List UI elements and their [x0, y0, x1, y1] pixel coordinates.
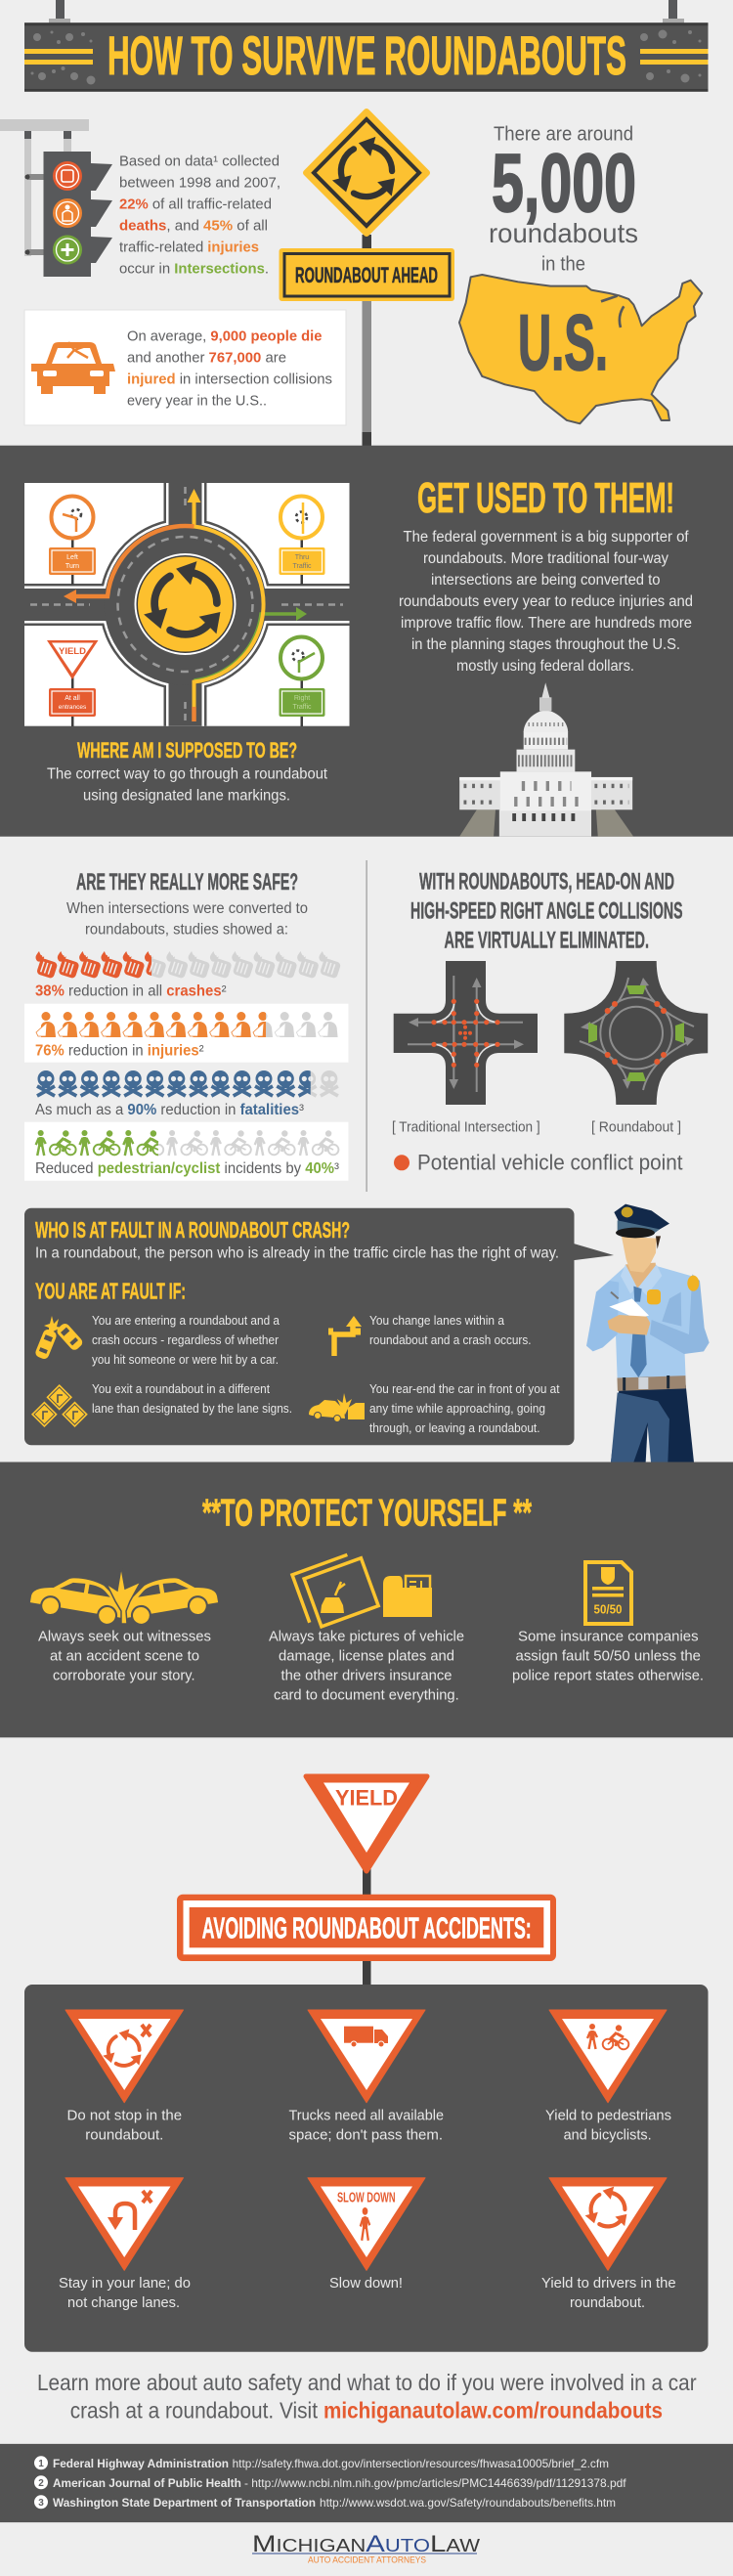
- text: fault 50/50: Some insurance companies: [518, 1628, 699, 1644]
- icon: US Capitol: [459, 682, 633, 837]
- panel: to protect yourself: [0, 1463, 733, 1737]
- text: pictures: [269, 1628, 464, 1703]
- icon: lane signs: [31, 1384, 88, 1427]
- row background: pedestrians: [24, 1122, 348, 1181]
- stat: 5,000 roundabouts: 5,000: [492, 137, 636, 229]
- source 1: http://safety.fhwa.dot.gov/intersection/resources/fhwasa10005/brief_2.cfm: [233, 2457, 609, 2470]
- icon: photographs and insurance folder: [292, 1550, 432, 1630]
- text: witnesses: [38, 1628, 211, 1683]
- source 1: Federal Highway Administration: [53, 2457, 229, 2470]
- text: pictures: card to document everything.: [274, 1686, 459, 1703]
- text: yearly deaths and injuries: and another 767,000 are: [127, 350, 286, 366]
- text: federal support: roundabouts. More traditional four-way: [423, 550, 668, 567]
- header sign: [24, 0, 708, 92]
- sign: thru traffic: Thru: [295, 554, 309, 561]
- stat: fatalities: As much as a 90% reduction in fatalities³: [35, 1102, 304, 1118]
- stat: pedestrians and cyclists: Reduced pedestrian/cyclist incidents by 40%³: [35, 1160, 339, 1177]
- sign: avoiding roundabout accidents: [177, 1895, 556, 1961]
- map: United States: [459, 275, 702, 423]
- icon: 50/50 document: [585, 1562, 631, 1624]
- sign: yield: [306, 1776, 427, 1871]
- icon row: injuries: [36, 1012, 338, 1037]
- diagram: roundabout conflict points: [564, 961, 708, 1105]
- text: yearly deaths and injuries: every year in the U.S..: [127, 393, 267, 409]
- panel: get used to them: [0, 446, 733, 837]
- text: federal support: improve traffic flow. There are hundreds more: [401, 615, 692, 632]
- icon row: pedestrians and cyclists: [36, 1130, 338, 1156]
- heading: who is at fault: WHO IS AT FAULT IN A ROUNDABOUT CRASH?: [35, 1217, 350, 1243]
- source 3: http://www.wsdot.wa.gov/Safety/roundabouts/benefits.htm: [320, 2496, 616, 2510]
- sign: yield at all entrances: YIELD: [59, 646, 86, 657]
- sign: right traffic: [280, 637, 324, 726]
- text: fault 50/50: assign fault 50/50 unless the: [516, 1647, 701, 1664]
- text: change lanes: roundabout and a crash occurs.: [369, 1333, 532, 1347]
- tip: stay in lane: not change lanes.: [67, 2294, 180, 2311]
- tip: slow down: [308, 2178, 425, 2292]
- text: fault 50/50: [512, 1628, 704, 1683]
- caption: roundabout: [ Roundabout ]: [591, 1118, 681, 1135]
- sign: yield at all entrances: entrances: [59, 704, 87, 711]
- icon: crashed car: [31, 342, 115, 394]
- text: yearly deaths and injuries: On average, 9,000 people die: [127, 328, 323, 344]
- icon: lane change arrow: [328, 1316, 362, 1356]
- panel: tips: [24, 1985, 708, 2352]
- text: witnesses: Always seek out witnesses: [38, 1628, 211, 1644]
- map: United States: U.S.: [518, 299, 608, 387]
- tip: do not stop: roundabout.: [85, 2126, 163, 2143]
- text: federal support: roundabouts every year to reduce injuries and: [399, 593, 693, 610]
- text: lane marking note: using designated lane markings.: [83, 787, 290, 804]
- text: pictures: Always take pictures of vehicle: [269, 1628, 464, 1644]
- tip: yield to drivers: roundabout.: [570, 2294, 645, 2311]
- diagram: roundabout lanes: [24, 483, 350, 726]
- figure: police officer: [586, 1204, 710, 1463]
- text: lane marking note: [47, 766, 328, 804]
- text: witnesses: at an accident scene to: [50, 1647, 199, 1664]
- text block: intersection statistics: between 1998 and 2007,: [119, 175, 280, 191]
- sign: yield: YIELD: [335, 1786, 398, 1811]
- tip: pedestrians: Yield to pedestrians: [545, 2107, 671, 2123]
- call to action: [37, 2370, 697, 2423]
- heading: where am I supposed to be: WHERE AM I SUPPOSED TO BE?: [77, 738, 297, 763]
- heading: **TO PROTECT YOURSELF **: [202, 1493, 533, 1535]
- tip: pedestrians: [545, 2010, 671, 2143]
- source 1: [34, 2456, 609, 2470]
- panel: fault speech bubble: [24, 1208, 614, 1445]
- row background: injuries: [24, 1004, 348, 1063]
- text: federal support: intersections are being converted to: [431, 572, 661, 589]
- text: right of way: In a roundabout, the person who is already in the traffic circle has the right of way.: [35, 1245, 559, 1262]
- text: entering a roundabout: you hit someone or were hit by a car.: [92, 1353, 279, 1367]
- text: yearly deaths and injuries: [127, 328, 332, 409]
- heading: [410, 868, 682, 953]
- tip: yield to drivers: Yield to drivers in the: [541, 2275, 676, 2292]
- heading: ARE THEY REALLY MORE SAFE?: [76, 869, 298, 895]
- sign: yield at all entrances: [47, 640, 98, 726]
- tip: do not stop: Do not stop in the: [67, 2107, 182, 2123]
- sign: right traffic: Right: [294, 695, 310, 702]
- heading: you are at fault if: YOU ARE AT FAULT IF:: [35, 1279, 186, 1304]
- sign: left turn: Left: [66, 554, 78, 561]
- divider: [366, 860, 367, 1192]
- text: rear-end: [369, 1382, 560, 1435]
- legend: Potential vehicle conflict point: [417, 1151, 682, 1175]
- text: wrong lane exit: You exit a roundabout in a different: [92, 1382, 270, 1396]
- tip: trucks: Trucks need all available: [289, 2107, 444, 2123]
- tip: do not stop: [65, 2010, 184, 2143]
- text: wrong lane exit: [92, 1382, 292, 1416]
- text: pictures: the other drivers insurance: [281, 1667, 452, 1683]
- panel: are they really more safe: [24, 869, 348, 1181]
- panel: intersection deaths card: [24, 310, 346, 425]
- tip: trucks: space; don't pass them.: [289, 2126, 443, 2143]
- call to action: crash at a roundabout. Visit: [70, 2397, 319, 2423]
- sign: yield at all entrances: At all: [65, 695, 80, 702]
- text: federal support: [399, 529, 693, 675]
- text: federal support: mostly using federal dollars.: [456, 658, 634, 675]
- icon: car crash: [28, 1567, 220, 1628]
- central island: [135, 553, 237, 655]
- stat: crashes: 38% reduction in all crashes²: [35, 983, 227, 1000]
- logo: MICHIGAN AUTO LAW: [252, 2531, 480, 2557]
- source 1: 1: [38, 2459, 44, 2469]
- tip: slow down: Slow down!: [329, 2275, 403, 2292]
- source 3: [34, 2495, 616, 2510]
- tip: pedestrians: and bicyclists.: [564, 2126, 652, 2143]
- call to action: michiganautolaw.com/roundabouts: [323, 2397, 663, 2423]
- text: federal support: The federal government is a big supporter of: [403, 529, 689, 546]
- text: entering a roundabout: crash occurs - regardless of whether: [92, 1333, 279, 1347]
- text: witnesses: corroborate your story.: [53, 1667, 195, 1683]
- tip: stay in lane: [59, 2178, 191, 2311]
- lane arrow: right turn: [194, 607, 307, 680]
- logo: AUTO ACCIDENT ATTORNEYS: [308, 2555, 426, 2566]
- text: entering a roundabout: [92, 1314, 280, 1367]
- tip: stay in lane: Stay in your lane; do: [59, 2275, 191, 2292]
- source 3: Washington State Department of Transportation: [53, 2496, 316, 2510]
- text: fault 50/50: police report states otherwise.: [512, 1667, 704, 1683]
- text: yearly deaths and injuries: injured in intersection collisions: [127, 371, 332, 387]
- text: pictures: damage, license plates and: [279, 1647, 454, 1664]
- stat: 5,000 roundabouts: [489, 123, 638, 276]
- sign: thru traffic: [280, 497, 324, 585]
- lane arrow: left turn: [64, 526, 194, 721]
- text: rear-end: You rear-end the car in front of you at: [369, 1382, 560, 1396]
- lane arrow: through traffic: [188, 489, 264, 709]
- tip: slow down: SLOW DOWN: [337, 2190, 396, 2205]
- text: entering a roundabout: You are entering a roundabout and a: [92, 1314, 280, 1328]
- text: federal support: in the planning stages throughout the U.S.: [411, 636, 680, 653]
- diagram: traditional intersection: [394, 961, 538, 1105]
- intro text: roundabouts, studies showed a:: [85, 922, 288, 939]
- text block: intersection statistics: deaths, and 45% of all: [119, 218, 268, 234]
- sign: left turn: [49, 497, 96, 585]
- stat: 5,000 roundabouts: in the: [541, 254, 585, 276]
- source 3: 3: [38, 2498, 44, 2509]
- text: rear-end: through, or leaving a roundabout.: [369, 1421, 539, 1435]
- sign: left turn: Turn: [65, 563, 79, 570]
- icon: rear-end collision: [309, 1393, 365, 1421]
- intro text: [66, 900, 308, 939]
- source 2: [34, 2475, 626, 2490]
- sign post: [363, 1857, 371, 1989]
- tip: trucks: [289, 2010, 444, 2143]
- text block: intersection statistics: Based on data¹ collected: [119, 153, 280, 169]
- source 2: 2: [38, 2478, 44, 2489]
- text: change lanes: You change lanes within a: [369, 1314, 504, 1328]
- text block: intersection statistics: occur in Intersections.: [119, 261, 269, 277]
- tip: yield to drivers: [541, 2178, 676, 2311]
- text block: intersection statistics: 22% of all traffic-related: [119, 196, 272, 212]
- sign: thru traffic: Traffic: [292, 563, 312, 570]
- panel: conflict points: [392, 868, 708, 1175]
- stat: 5,000 roundabouts: roundabouts: [489, 218, 638, 248]
- text: change lanes: [369, 1314, 532, 1347]
- icon row: fatalities: [37, 1070, 338, 1096]
- panel: sources: [0, 2443, 733, 2523]
- icon: colliding cars: [34, 1316, 84, 1361]
- stat: 5,000 roundabouts: There are around: [494, 123, 633, 145]
- source 2: American Journal of Public Health: [53, 2476, 241, 2490]
- text: wrong lane exit: lane than designated by the lane signs.: [92, 1402, 292, 1416]
- source 2: - http://www.ncbi.nlm.nih.gov/pmc/articles/PMC1446639/pdf/11291378.pdf: [244, 2476, 626, 2490]
- text block: intersection statistics: [119, 153, 280, 277]
- text: rear-end: any time while approaching, going: [369, 1402, 545, 1416]
- icon row: crashes: [36, 951, 341, 979]
- sign: roundabout ahead: [280, 111, 454, 446]
- sign: right traffic: Traffic: [292, 704, 312, 711]
- text block: intersection statistics: traffic-related injuries: [119, 240, 259, 255]
- icon: 50/50 document: 50/50: [594, 1602, 622, 1617]
- text: lane marking note: The correct way to go through a roundabout: [47, 766, 328, 783]
- icon: traffic light: [0, 119, 112, 277]
- stat: injuries: 76% reduction in injuries²: [35, 1042, 204, 1059]
- intro text: When intersections were converted to: [66, 900, 308, 917]
- sign text: ROUNDABOUT AHEAD: [295, 263, 438, 287]
- caption: traditional intersection: [ Traditional Intersection ]: [392, 1118, 540, 1135]
